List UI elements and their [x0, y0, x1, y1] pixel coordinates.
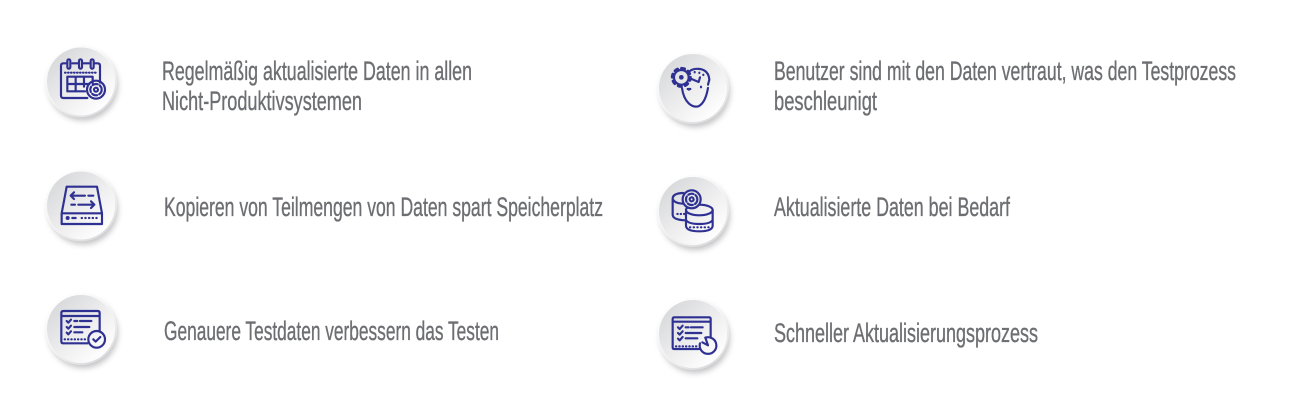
item 5: updated data on demand — [657, 175, 1010, 250]
item 1: regularly updated data — [45, 46, 472, 120]
text: item 1: Nicht-Produktivsystemen — [162, 86, 362, 116]
icon: checklist window with clock — [657, 298, 730, 373]
item 3: more accurate test data — [45, 293, 499, 368]
icon: storage drive with arrows — [45, 170, 118, 244]
icon: checklist window with check badge — [45, 293, 118, 368]
text: item 1 — [162, 56, 472, 116]
text: item 4: beschleunigt — [774, 86, 877, 116]
text: item 1: Regelmäßig aktualisierte Daten in allen — [162, 56, 472, 86]
text: item 5: Aktualisierte Daten bei Bedarf — [774, 192, 1010, 222]
icon: head with gear — [657, 52, 730, 127]
icon: database cylinders with dial — [657, 175, 730, 250]
icon: calendar with refresh dial — [45, 46, 118, 120]
text: item 3: Genauere Testdaten verbessern das Testen — [164, 316, 499, 346]
item 2: copying subsets — [45, 170, 603, 244]
text: item 4 — [774, 56, 1236, 116]
item 6: faster update process — [657, 298, 1038, 373]
text: item 6: Schneller Aktualisierungsprozess — [774, 318, 1038, 348]
item 4: users familiar with data — [657, 52, 1236, 127]
text: item 2: Kopieren von Teilmengen von Daten spart Speicherplatz — [164, 192, 603, 222]
